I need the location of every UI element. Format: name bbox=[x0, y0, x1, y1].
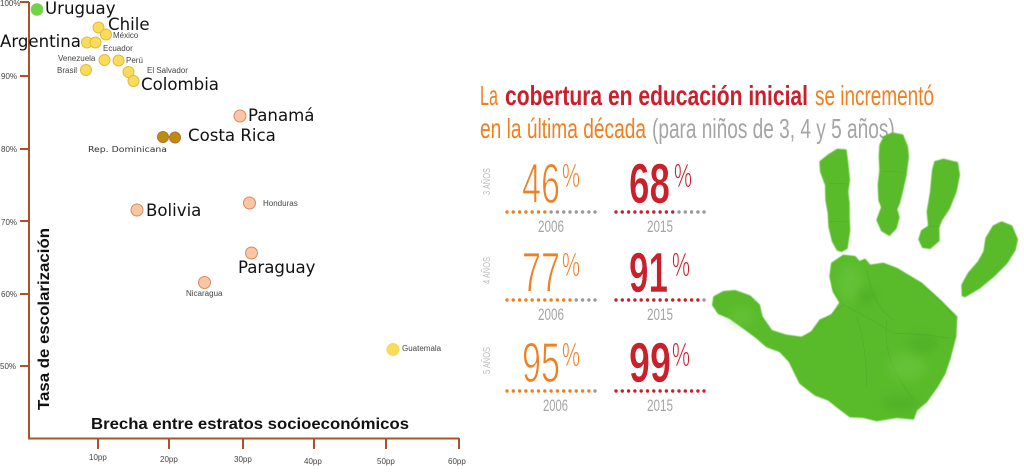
large country labels: Argentina bbox=[0, 32, 81, 51]
headline: (para niños de 3, 4 y 5 años). bbox=[652, 113, 900, 144]
y axis tick labels bbox=[0, 0, 20, 371]
2006 remaining dots bbox=[549, 210, 597, 214]
2006 dots bbox=[505, 298, 572, 302]
2015 value: 68 bbox=[629, 152, 670, 216]
headline: en la última década bbox=[480, 113, 646, 144]
large country labels: Panamá bbox=[248, 106, 314, 125]
2015 value: % bbox=[672, 246, 690, 283]
age label: 4 AÑOS bbox=[480, 257, 493, 284]
y axis tick labels: 50% bbox=[0, 362, 16, 371]
row: 4 años bbox=[480, 241, 706, 324]
2015 dots bbox=[614, 210, 674, 214]
salmon data points bbox=[131, 110, 258, 288]
handprint highlights bbox=[730, 265, 925, 380]
2006 remaining dots bbox=[575, 298, 597, 302]
year labels bbox=[538, 218, 673, 236]
scatter chart bbox=[0, 0, 466, 466]
small country labels bbox=[57, 31, 442, 353]
x axis tick labels: 10pp bbox=[89, 453, 107, 462]
row: 3 años bbox=[480, 152, 706, 236]
small country labels: Venezuela bbox=[58, 54, 96, 63]
small country labels: Brasil bbox=[57, 66, 77, 75]
green data point bbox=[31, 4, 43, 16]
small country labels: México bbox=[113, 31, 139, 40]
handprint shadow bbox=[857, 287, 938, 411]
2015 value: 99 bbox=[629, 331, 671, 395]
2015 value: % bbox=[672, 336, 690, 373]
y axis tick labels: 70% bbox=[1, 218, 17, 227]
year labels: 2015 bbox=[647, 218, 673, 236]
year labels: 2015 bbox=[647, 306, 673, 324]
large country labels: Paraguay bbox=[238, 258, 316, 277]
year labels: 2006 bbox=[538, 218, 564, 236]
headline: cobertura en educación inicial bbox=[505, 80, 808, 111]
2006 value: % bbox=[562, 246, 580, 283]
2006 value: % bbox=[562, 336, 580, 373]
year labels: 2006 bbox=[538, 306, 564, 324]
y axis title: Tasa de escolarización bbox=[36, 228, 53, 410]
2006 value: 77 bbox=[522, 241, 560, 305]
2015 dots bbox=[614, 389, 706, 393]
row: 5 años bbox=[480, 331, 706, 415]
small country labels: Perú bbox=[126, 56, 143, 65]
2015 remaining dots bbox=[677, 210, 706, 214]
yellow data points bbox=[80, 22, 399, 356]
handprint creases bbox=[813, 171, 955, 400]
x axis title: Brecha entre estratos socioeconómicos bbox=[91, 416, 409, 433]
small country labels: El Salvador bbox=[147, 66, 188, 75]
year labels bbox=[538, 306, 673, 324]
2015 remaining dot bbox=[702, 298, 706, 302]
small country labels: Ecuador bbox=[103, 44, 133, 53]
dark gold data points bbox=[158, 132, 180, 143]
x axis tick labels: 40pp bbox=[304, 457, 322, 466]
2006 value: 46 bbox=[522, 152, 560, 216]
large country labels bbox=[0, 0, 316, 277]
year labels: 2006 bbox=[543, 397, 568, 415]
x axis tick labels: 30pp bbox=[234, 455, 252, 464]
icon: green handprint bbox=[713, 133, 1017, 421]
x axis tick labels: 50pp bbox=[377, 457, 395, 466]
y axis tick labels: 90% bbox=[1, 72, 17, 81]
small country labels: Honduras bbox=[263, 199, 298, 208]
x axis tick labels bbox=[89, 453, 466, 466]
headline: La bbox=[480, 80, 498, 111]
small country labels: Guatemala bbox=[402, 344, 442, 353]
x axis tick labels: 60pp bbox=[448, 457, 466, 466]
large country labels: Colombia bbox=[141, 75, 219, 94]
2006 value: % bbox=[562, 157, 580, 194]
large country labels: Bolivia bbox=[146, 201, 201, 220]
large country labels: Costa Rica bbox=[188, 126, 276, 145]
age label: 5 AÑOS bbox=[480, 347, 493, 374]
headline bbox=[480, 80, 934, 144]
2015 dots bbox=[614, 298, 700, 302]
2006 dots bbox=[505, 389, 591, 393]
chart axes bbox=[20, 2, 459, 449]
year labels: 2015 bbox=[647, 397, 673, 415]
y axis tick labels: 60% bbox=[1, 290, 17, 299]
large country labels: Chile bbox=[108, 15, 150, 34]
x axis tick labels: 20pp bbox=[160, 455, 178, 464]
2006 value: 95 bbox=[522, 331, 560, 395]
age label: 3 AÑOS bbox=[480, 168, 493, 195]
small country labels: Nicaragua bbox=[186, 289, 223, 298]
2006 dots bbox=[505, 210, 546, 214]
headline: se incrementó bbox=[815, 80, 934, 111]
y axis tick labels: 80% bbox=[1, 145, 17, 154]
small country labels: Rep. Dominicana bbox=[88, 145, 167, 154]
year labels bbox=[543, 397, 673, 415]
2015 value: 91 bbox=[629, 241, 668, 305]
2015 value: % bbox=[674, 157, 692, 194]
2006 remaining dot bbox=[593, 389, 597, 393]
